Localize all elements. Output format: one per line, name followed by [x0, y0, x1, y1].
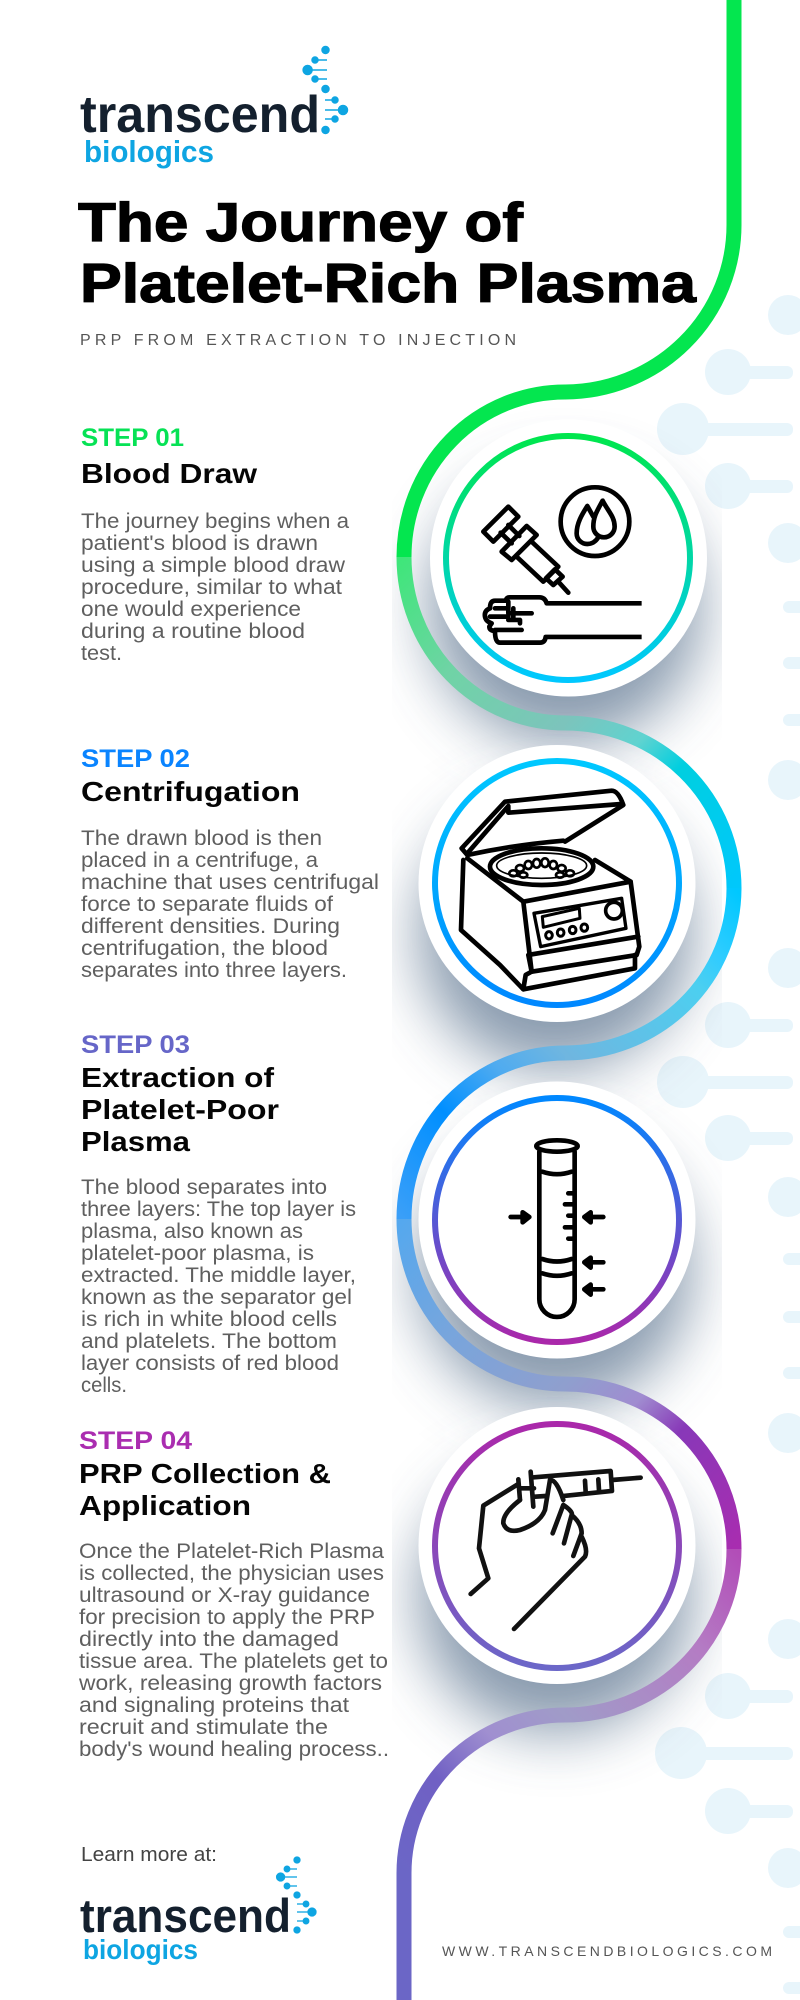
logo: footer: transcend [80, 1889, 291, 1942]
icon: test tube with arrows [511, 1140, 603, 1317]
panel: step 04 text: tissue area. The platelets get to [79, 1650, 388, 1673]
panel: step 01 text: procedure, similar to what [81, 576, 342, 599]
panel: step 02 text: placed in a centrifuge, a [81, 849, 318, 872]
panel: step 02 text: force to separate fluids of [81, 893, 333, 916]
panel: step 01 text: Blood Draw [81, 458, 257, 489]
title: Platelet-Rich Plasma [80, 252, 696, 314]
panel: step 02 text: Centrifugation [81, 776, 300, 807]
panel: step 02 text: different densities. During [81, 915, 340, 938]
title [78, 191, 696, 314]
panel: step 04 text: Application [79, 1490, 251, 1521]
logo: footer [80, 1857, 316, 1965]
panel: step 03 text: platelet-poor plasma, is [81, 1242, 314, 1265]
panel: step 01 text: The journey begins when a [81, 510, 349, 533]
panel: step 03 text: cells. [81, 1374, 127, 1397]
panel: step 02 text: STEP 02 [81, 745, 190, 773]
logo: footer: biologics [83, 1934, 198, 1965]
panel: step 03 text: layer consists of red blood [81, 1352, 339, 1375]
panel: step 04 circle with hand syringe icon [418, 1407, 696, 1684]
panel: step 03 text: known as the separator gel [81, 1286, 352, 1309]
panel: step 03 text [81, 1031, 356, 1397]
panel: step 02 text: centrifugation, the blood [81, 937, 328, 960]
logo: top [80, 46, 348, 169]
panel: step 04 text: is collected, the physician uses [79, 1562, 384, 1585]
logo: top: transcend [80, 86, 320, 144]
panel: step 02 text [81, 745, 379, 982]
panel: step 03 text: STEP 03 [81, 1031, 190, 1059]
panel: step 04 text: work, releasing growth factors [78, 1672, 382, 1695]
panel: step 01 text: using a simple blood draw [81, 554, 346, 577]
panel: step 03 text: Plasma [81, 1126, 190, 1157]
panel: step 04 text: ultrasound or X-ray guidance [79, 1584, 370, 1607]
panel: step 03 text: plasma, also known as [81, 1220, 303, 1243]
background molecule pattern [655, 295, 800, 1994]
panel: step 03 text: Platelet-Poor [81, 1094, 279, 1125]
icon: centrifuge [461, 791, 639, 989]
panel: step 02 text: machine that uses centrifugal [81, 871, 379, 894]
panel: step 01 circle with blood draw icon [430, 420, 707, 696]
panel: step 04 text: and signaling proteins that [79, 1694, 349, 1717]
panel: step 04 text: recruit and stimulate the [79, 1716, 328, 1739]
panel: step 04 text: Once the Platelet-Rich Plasma [79, 1540, 384, 1563]
panel: step 01 text [81, 424, 349, 665]
panel: step 04 text: directly into the damaged [79, 1628, 339, 1651]
circle drop shadows [419, 472, 701, 1733]
panel: step 03 text: is rich in white blood cells [81, 1308, 337, 1331]
panel: step 03 text: extracted. The middle layer, [81, 1264, 356, 1287]
panel: step 03 text: The blood separates into [81, 1176, 327, 1199]
subtitle: PRP FROM EXTRACTION TO INJECTION [80, 332, 516, 349]
panel: step 03 circle with test tube icon [418, 1082, 696, 1358]
panel: step 03 text: Extraction of [81, 1062, 275, 1093]
panel: step 02 text: separates into three layers. [81, 959, 347, 982]
panel: step 04 text: STEP 04 [79, 1427, 192, 1455]
panel: step 02 text: The drawn blood is then [81, 827, 322, 850]
panel: step 01 text: test. [81, 642, 122, 665]
panel: step 03 text: three layers: The top layer is [81, 1198, 356, 1221]
title: The Journey of [78, 191, 524, 253]
panel: step 01 text: during a routine blood [81, 620, 305, 643]
panel: step 01 text: patient's blood is drawn [81, 532, 318, 555]
panel: step 03 text: and platelets. The bottom [81, 1330, 337, 1353]
icon: hand holding syringe [471, 1471, 641, 1629]
footer website url: WWW.TRANSCENDBIOLOGICS.COM [442, 1943, 772, 1959]
journey path line [404, 0, 734, 2000]
panel: step 01 text: STEP 01 [81, 424, 184, 452]
panel: step 02 circle with centrifuge icon [418, 745, 696, 1022]
panel: step 04 text: body's wound healing process.. [79, 1738, 389, 1761]
logo: top: biologics [84, 134, 214, 169]
panel: step 01 text: one would experience [81, 598, 301, 621]
footer learn more label: Learn more at: [81, 1844, 217, 1866]
panel: step 04 text: for precision to apply the PRP [79, 1606, 375, 1629]
panel: step 04 text [78, 1427, 389, 1761]
panel: step 04 text: PRP Collection & [79, 1458, 331, 1489]
icon: syringe, blood drops, arm [483, 487, 642, 643]
